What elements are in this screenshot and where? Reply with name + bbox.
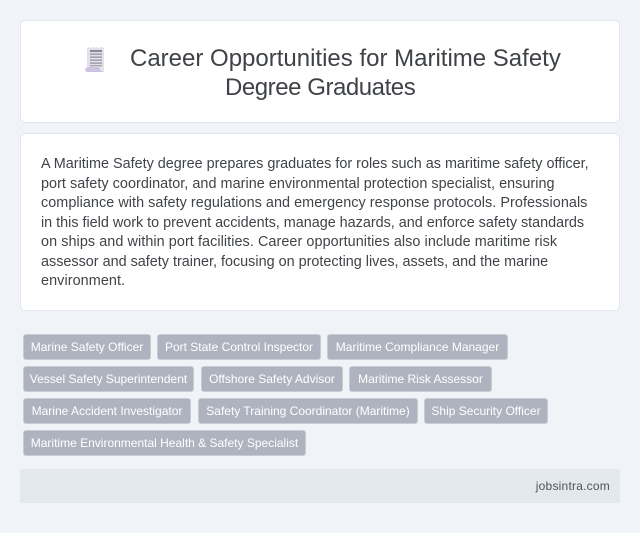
description panel bbox=[20, 133, 620, 311]
description text: in this field work to prevent accidents, manage hazards, and enforce safety standards bbox=[41, 214, 584, 230]
tag: Offshore Safety Advisor bbox=[209, 372, 335, 386]
tag bbox=[424, 398, 548, 424]
tag: Maritime Risk Assessor bbox=[358, 372, 483, 386]
description text: port safety coordinator, and marine environmental protection specialist, ensuring bbox=[41, 176, 555, 192]
tag list bbox=[23, 334, 548, 456]
tag: Marine Accident Investigator bbox=[32, 404, 182, 418]
tag bbox=[23, 430, 306, 456]
footer bar bbox=[20, 469, 620, 503]
tag: Vessel Safety Superintendent bbox=[30, 372, 187, 386]
icon: document scroll bbox=[85, 47, 104, 72]
description text: on ships and within port facilities. Career opportunities also include maritime risk bbox=[41, 234, 557, 250]
description text: A Maritime Safety degree prepares graduates for roles such as maritime safety officer, bbox=[41, 156, 589, 172]
tag bbox=[23, 398, 191, 424]
tag bbox=[157, 334, 321, 360]
tag bbox=[23, 366, 194, 392]
tag bbox=[201, 366, 343, 392]
tag: Maritime Compliance Manager bbox=[336, 340, 499, 354]
title panel bbox=[20, 20, 620, 123]
tag bbox=[198, 398, 418, 424]
tag: Maritime Environmental Health & Safety Specialist bbox=[31, 436, 298, 450]
tag bbox=[349, 366, 492, 392]
description text: compliance with safety regulations and emergency response protocols. Professionals bbox=[41, 195, 587, 211]
heading: Career Opportunities for Maritime Safety bbox=[130, 45, 561, 72]
tag: Marine Safety Officer bbox=[31, 340, 143, 354]
tag: Ship Security Officer bbox=[431, 404, 541, 418]
tag: Port State Control Inspector bbox=[165, 340, 313, 354]
footer source text: jobsintra.com bbox=[536, 479, 610, 493]
heading bbox=[130, 45, 561, 101]
heading: Degree Graduates bbox=[225, 74, 415, 101]
tag bbox=[327, 334, 508, 360]
tag bbox=[23, 334, 151, 360]
description text: assessor and safety trainer, focusing on protecting lives, assets, and the marine bbox=[41, 254, 548, 270]
description text: environment. bbox=[41, 273, 125, 289]
description text bbox=[41, 156, 589, 289]
tag: Safety Training Coordinator (Maritime) bbox=[206, 404, 410, 418]
